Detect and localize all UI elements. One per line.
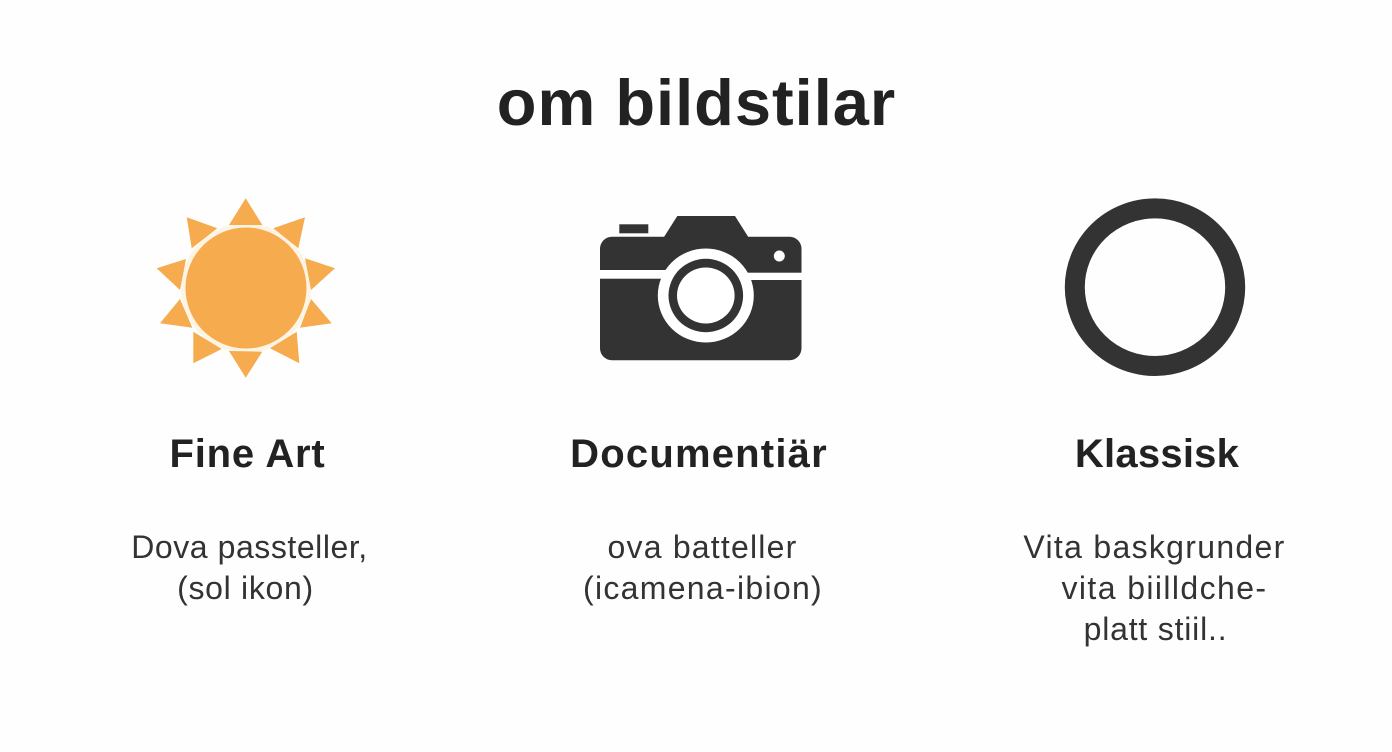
heading: Fine Art: Fine Art bbox=[169, 432, 326, 476]
text: Klassisk description: platt stiil.. bbox=[1084, 611, 1227, 647]
icon: sun bbox=[156, 198, 335, 378]
text: Klassisk description: Vita baskgrunder bbox=[1023, 529, 1286, 565]
text: Klassisk description bbox=[1023, 529, 1286, 647]
icon: ring bbox=[1064, 198, 1246, 376]
text: Fine Art description: (sol ikon) bbox=[177, 570, 314, 606]
text: Fine Art description bbox=[131, 529, 368, 606]
heading: Klassisk: Klassisk bbox=[1075, 432, 1239, 476]
text: Documentiär description: ova batteller bbox=[608, 529, 797, 565]
heading: Documentiär: Documentiär bbox=[570, 432, 828, 476]
text: Documentiär description bbox=[583, 529, 823, 606]
text: Fine Art description: Dova passteller, bbox=[131, 529, 368, 565]
text: Klassisk description: vita biilldche- bbox=[1062, 570, 1267, 606]
text: Documentiär description: (icamena-ibion) bbox=[583, 570, 823, 606]
title: om bildstilar bbox=[497, 66, 896, 139]
icon: camera bbox=[600, 216, 802, 360]
